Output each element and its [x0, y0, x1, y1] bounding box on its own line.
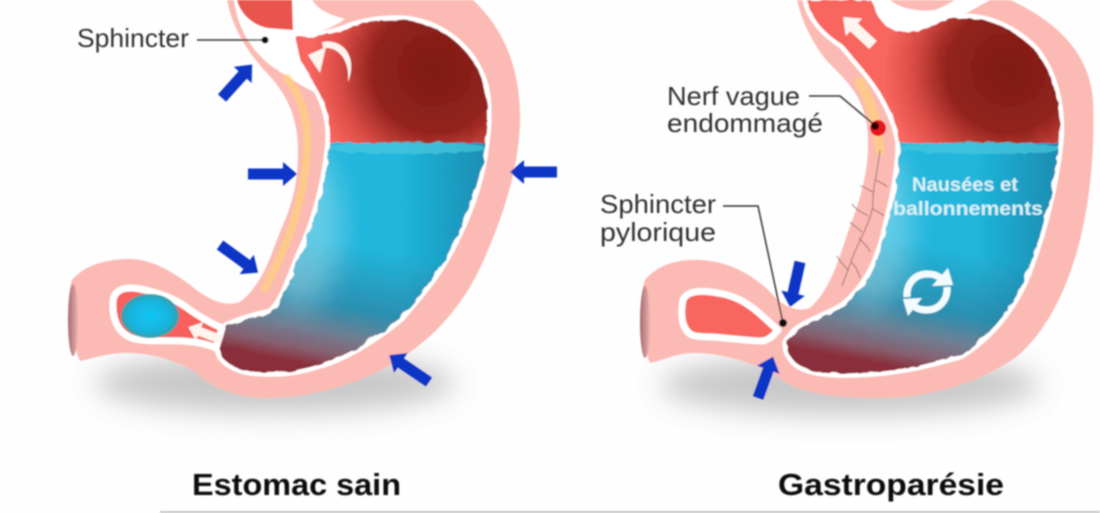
- bottom rule: [160, 511, 1100, 513]
- icon: churning cycle: [903, 268, 953, 316]
- damaged nerve marker: [840, 96, 886, 136]
- blue arrow bottom: [382, 345, 436, 392]
- blue arrow pylorus top: [778, 259, 812, 310]
- blue arrow pylorus bottom: [747, 353, 784, 402]
- upper wall pink lobe: [890, 0, 955, 11]
- food bolus: [121, 294, 179, 338]
- blue arrow right: [510, 160, 557, 184]
- symptom text: ballonnements: [893, 199, 1043, 220]
- white reflux arrow: [835, 8, 881, 54]
- label: damaged vagus nerve: endommagé: [667, 108, 823, 138]
- sphincter white zone: [234, 0, 345, 92]
- label: pyloric sphincter: pylorique: [600, 217, 716, 247]
- title: healthy stomach: Estomac sain: [192, 467, 401, 502]
- curved white arrow: [308, 41, 351, 82]
- duodenum opening: [640, 286, 650, 358]
- esophagus lumen: [237, 0, 293, 30]
- blue arrow upper left: [213, 57, 261, 106]
- gastric fluid: [218, 140, 486, 374]
- title: gastroparesis: Gastroparésie: [778, 467, 1004, 502]
- blue arrow lower left: [213, 235, 265, 282]
- stomach wall: [69, 0, 520, 398]
- damaged nerve branches: [837, 150, 887, 286]
- label: pyloric sphincter: [600, 189, 787, 327]
- duodenum opening: [68, 284, 78, 356]
- panel: healthy stomach: [68, 0, 557, 502]
- symptom text: [893, 175, 1043, 220]
- air pocket: [787, 0, 1060, 373]
- air pocket: [217, 20, 487, 372]
- label: pyloric sphincter: Sphincter: [600, 189, 716, 219]
- label: sphincter: Sphincter: [77, 23, 189, 53]
- shadow under gastroparesis stomach: [660, 355, 1040, 415]
- panel: gastroparesis stomach: [600, 0, 1093, 502]
- white flow arrow to bulb: [185, 318, 226, 349]
- shadow under healthy stomach: [95, 353, 455, 413]
- stomach cavity contents: [218, 18, 490, 374]
- upper wall fold: [871, 0, 990, 32]
- yellow vagus nerve: [265, 78, 307, 288]
- blue arrow middle left: [248, 162, 297, 186]
- stomach cavity contents: [780, 0, 1080, 383]
- label: damaged vagus nerve: Nerf vague: [667, 81, 800, 111]
- stomach cavity outline: [787, 0, 1060, 373]
- gastric fluid: [786, 140, 1060, 375]
- label: sphincter: [77, 23, 268, 53]
- antrum outline: [682, 291, 778, 341]
- bulb outline: [113, 288, 222, 348]
- symptom text: Nausées et: [912, 175, 1019, 196]
- yellow vagus nerve: [860, 82, 880, 150]
- label: damaged vagus nerve: [667, 81, 840, 138]
- stomach wall: [641, 0, 1093, 398]
- stomach cavity outline: [217, 20, 487, 372]
